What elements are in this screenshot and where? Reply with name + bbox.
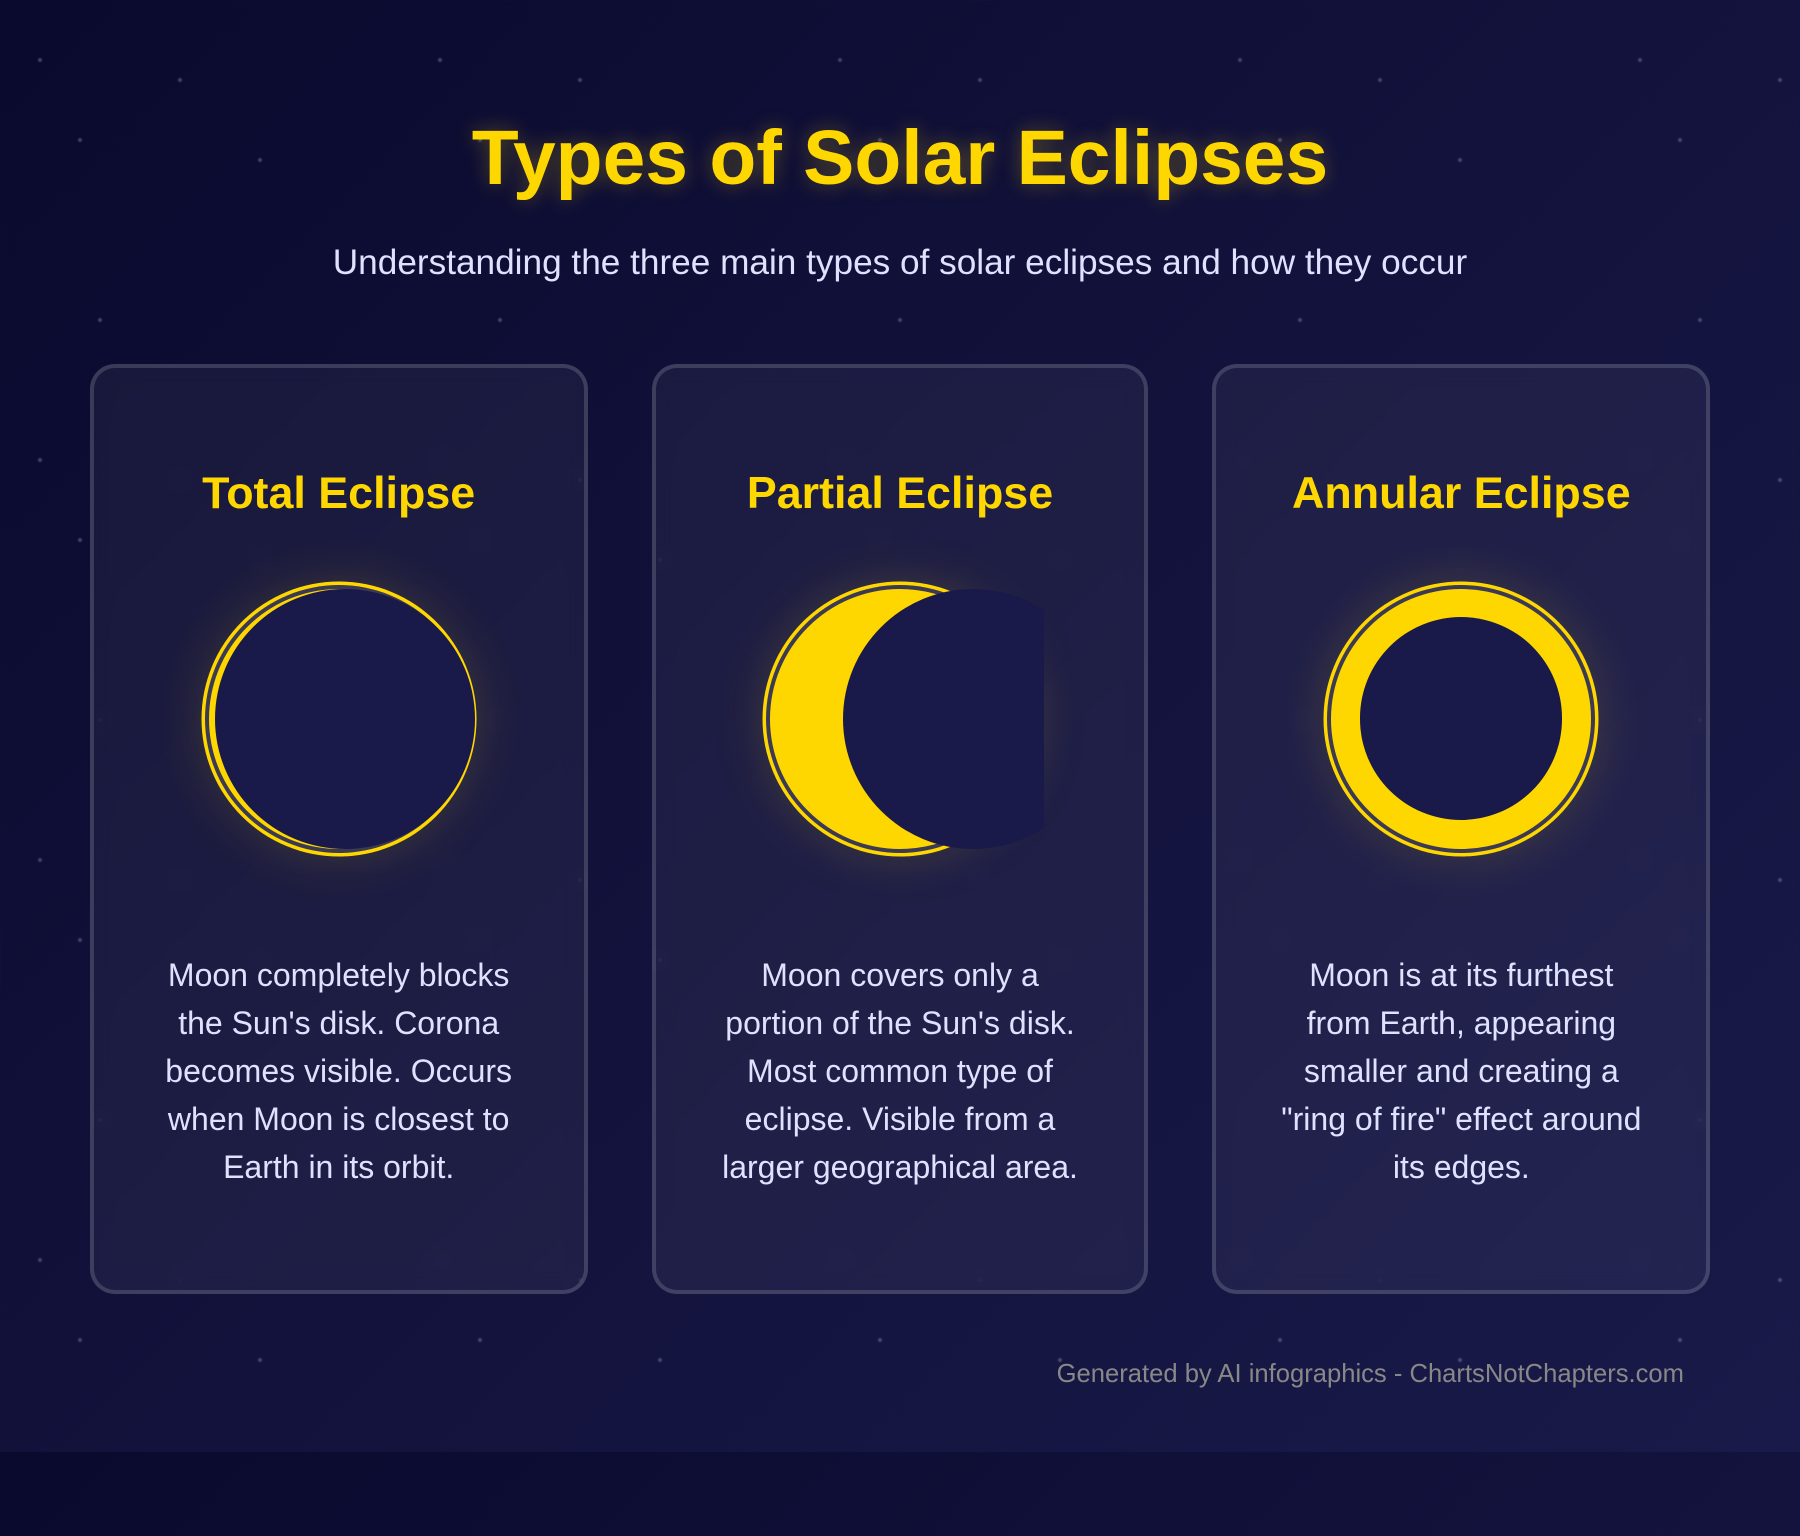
description: annular eclipse: its edges. (1393, 1148, 1530, 1184)
description: partial eclipse: larger geographical area. (722, 1148, 1078, 1184)
icon: partial eclipse diagram (750, 568, 1050, 870)
heading: total eclipse: Total Eclipse (202, 468, 475, 518)
panel: total eclipse (90, 364, 588, 1294)
description: annular eclipse: "ring of fire" effect around (1281, 1100, 1641, 1136)
description: annular eclipse: smaller and creating a (1304, 1052, 1619, 1088)
description: partial eclipse (722, 956, 1078, 1184)
description: annular eclipse: from Earth, appearing (1307, 1004, 1616, 1040)
description: partial eclipse: portion of the Sun's disk. (725, 1004, 1075, 1040)
description: total eclipse (165, 956, 512, 1184)
panel: annular eclipse (1212, 364, 1710, 1294)
title: Types of Solar Eclipses (472, 115, 1328, 201)
footer credit: Generated by AI infographics - ChartsNotChapters.com (1057, 1360, 1684, 1388)
description: total eclipse: Earth in its orbit. (223, 1148, 454, 1184)
heading: partial eclipse: Partial Eclipse (747, 468, 1053, 518)
panel: partial eclipse (652, 364, 1148, 1294)
description: annular eclipse: Moon is at its furthest (1309, 956, 1613, 992)
description: partial eclipse: Moon covers only a (761, 956, 1039, 992)
description: total eclipse: Moon completely blocks (168, 956, 509, 992)
description: total eclipse: when Moon is closest to (168, 1100, 509, 1136)
icon: total eclipse diagram (188, 568, 490, 870)
icon: annular eclipse diagram (1308, 566, 1614, 872)
description: total eclipse: becomes visible. Occurs (165, 1052, 512, 1088)
heading: annular eclipse: Annular Eclipse (1292, 468, 1631, 518)
description: partial eclipse: eclipse. Visible from a (745, 1100, 1055, 1136)
description: annular eclipse (1281, 956, 1641, 1184)
description: total eclipse: the Sun's disk. Corona (178, 1004, 499, 1040)
description: partial eclipse: Most common type of (747, 1052, 1053, 1088)
subtitle: Understanding the three main types of solar eclipses and how they occur (333, 243, 1467, 282)
